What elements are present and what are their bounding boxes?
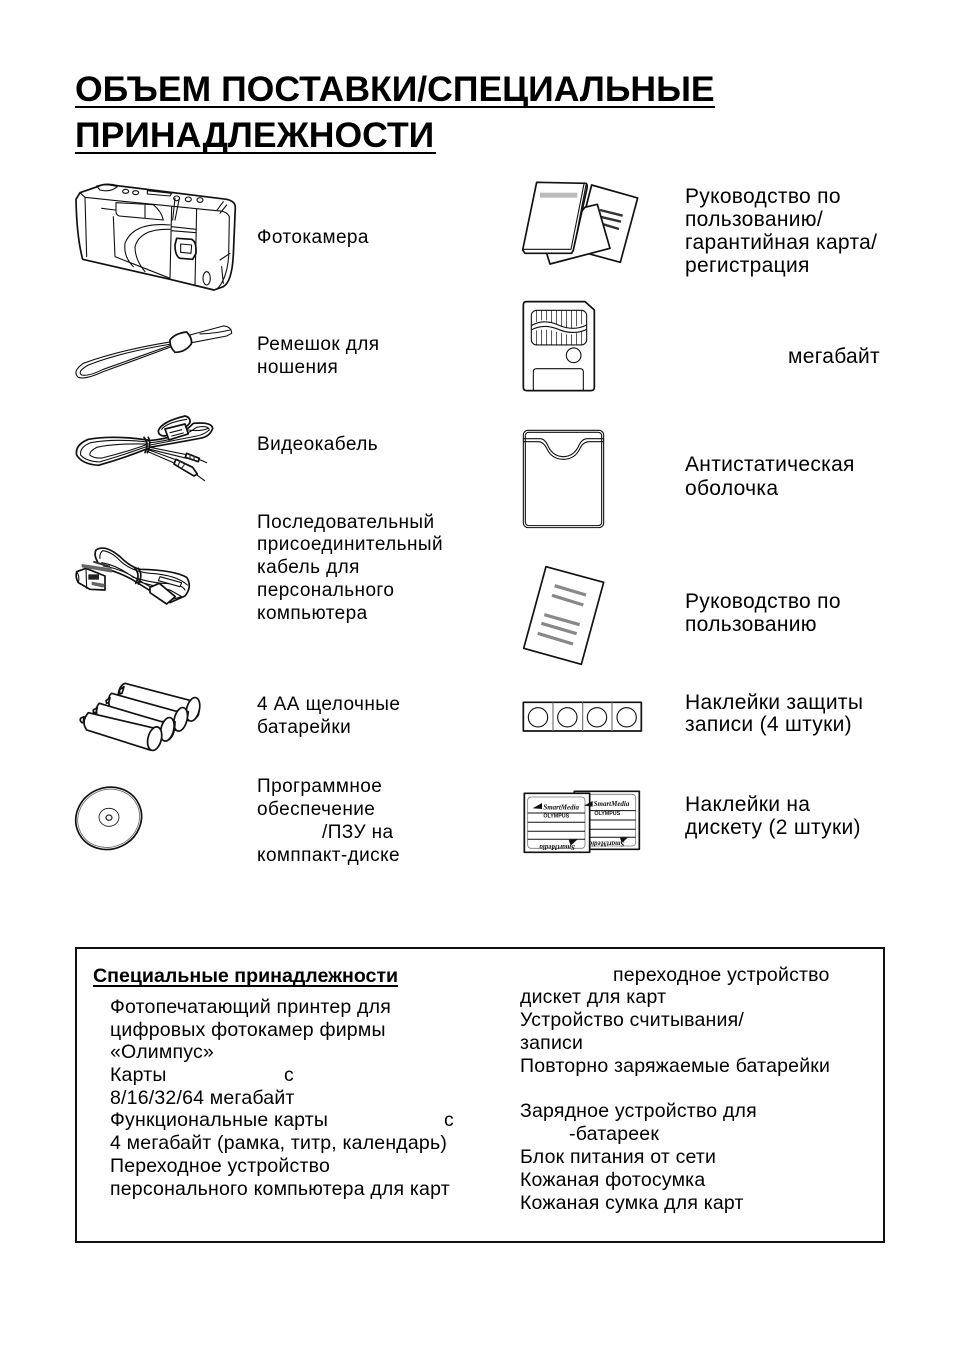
right column labels: Наклейки на [685,793,810,816]
icon: write-protect stickers [523,702,641,731]
icon: antistatic sleeve [523,430,604,528]
right column labels: Наклейки защиты [685,691,863,714]
icon: floppy labels [524,791,639,852]
accessories list left: Функциональные карты [110,1109,328,1131]
left column labels: кабель для [257,557,360,578]
accessories list right: Блок питания от сети [520,1146,716,1168]
right column labels: Руководство по [685,590,841,613]
heading: optional accessories: Специальные принадлежности [93,965,398,987]
accessories list left: цифровых фотокамер фирмы [110,1019,386,1041]
left column labels: батарейки [257,717,351,738]
left column labels: 4 АА щелочные [257,694,400,715]
accessories list right: Повторно заряжаемые батарейки [520,1055,830,1077]
right column labels: гарантийная карта/ [685,231,877,254]
right column labels: дискету (2 штуки) [685,816,861,839]
accessories list left: персонального компьютера для карт [110,1178,450,1200]
left column labels: компьютера [257,603,368,624]
accessories list left: «Олимпус» [110,1041,214,1063]
icon: floppy labels: SmartMedia [588,840,624,848]
accessories list right: Устройство считывания/ [520,1009,744,1031]
icon: CD-ROM [65,776,152,860]
icon: floppy labels: SmartMedia [539,843,575,851]
accessories list left: Карты [110,1064,167,1086]
icon: floppy labels: SmartMedia [594,800,630,808]
left column labels: Программное [257,776,382,797]
left column labels: комппакт-диске [257,845,400,866]
accessories list right: записи [520,1032,583,1054]
right column labels: оболочка [685,477,778,500]
icon: floppy labels: OLYMPUS [594,811,621,817]
title [75,69,715,155]
left column labels: персонального [257,580,394,601]
accessories list right: -батареек [569,1123,659,1145]
title: ПРИНАДЛЕЖНОСТИ [75,115,434,155]
left column labels: присоединительный [257,534,443,555]
icon: camera [76,184,235,290]
icon: wrist strap [76,326,232,378]
accessories list left [110,996,454,1200]
icon: instruction sheet [524,567,604,664]
accessories list right: Зарядное устройство для [520,1100,757,1122]
accessories list right [520,964,830,1214]
icon: SmartMedia card [523,302,594,391]
left column labels: Видеокабель [257,434,378,455]
accessories list left: Переходное устройство [110,1155,330,1177]
icon: 4 AA batteries [80,683,202,752]
left column labels: Фотокамера [257,227,369,248]
accessories list left: с [284,1064,294,1086]
icon: serial PC cable [76,548,189,604]
accessories list right: переходное устройство [613,964,830,986]
icon: floppy labels: OLYMPUS [543,814,570,820]
left column labels: ношения [257,357,338,378]
left column labels: обеспечение [257,799,375,820]
accessories list left: с [444,1109,454,1131]
right column labels: пользованию [685,613,817,636]
left column labels: Ремешок для [257,334,380,355]
left column labels [257,227,443,866]
right column labels [685,185,880,839]
title: ОБЪЕМ ПОСТАВКИ/СПЕЦИАЛЬНЫЕ [75,69,715,109]
icon: manual and warranty card [523,182,638,264]
panel: optional accessories [75,947,885,1243]
accessories list left: 4 мегабайт (рамка, титр, календарь) [110,1132,447,1154]
accessories list left: Фотопечатающий принтер для [110,996,391,1018]
icon: video cable [76,416,213,481]
icon: floppy labels: SmartMedia [543,803,580,811]
right column labels: пользованию/ [685,208,823,231]
left column labels: Последовательный [257,512,435,533]
right column labels: Руководство по [685,185,841,208]
right column labels: мегабайт [788,345,880,368]
accessories list right: Кожаная фотосумка [520,1169,705,1191]
right column labels: записи (4 штуки) [685,713,852,736]
accessories list right: дискет для карт [520,986,666,1008]
accessories list right: Кожаная сумка для карт [520,1192,744,1214]
right column labels: Антистатическая [685,453,855,476]
right column labels: регистрация [685,254,810,277]
accessories list left: 8/16/32/64 мегабайт [110,1087,295,1109]
left column labels: /ПЗУ на [322,822,394,843]
